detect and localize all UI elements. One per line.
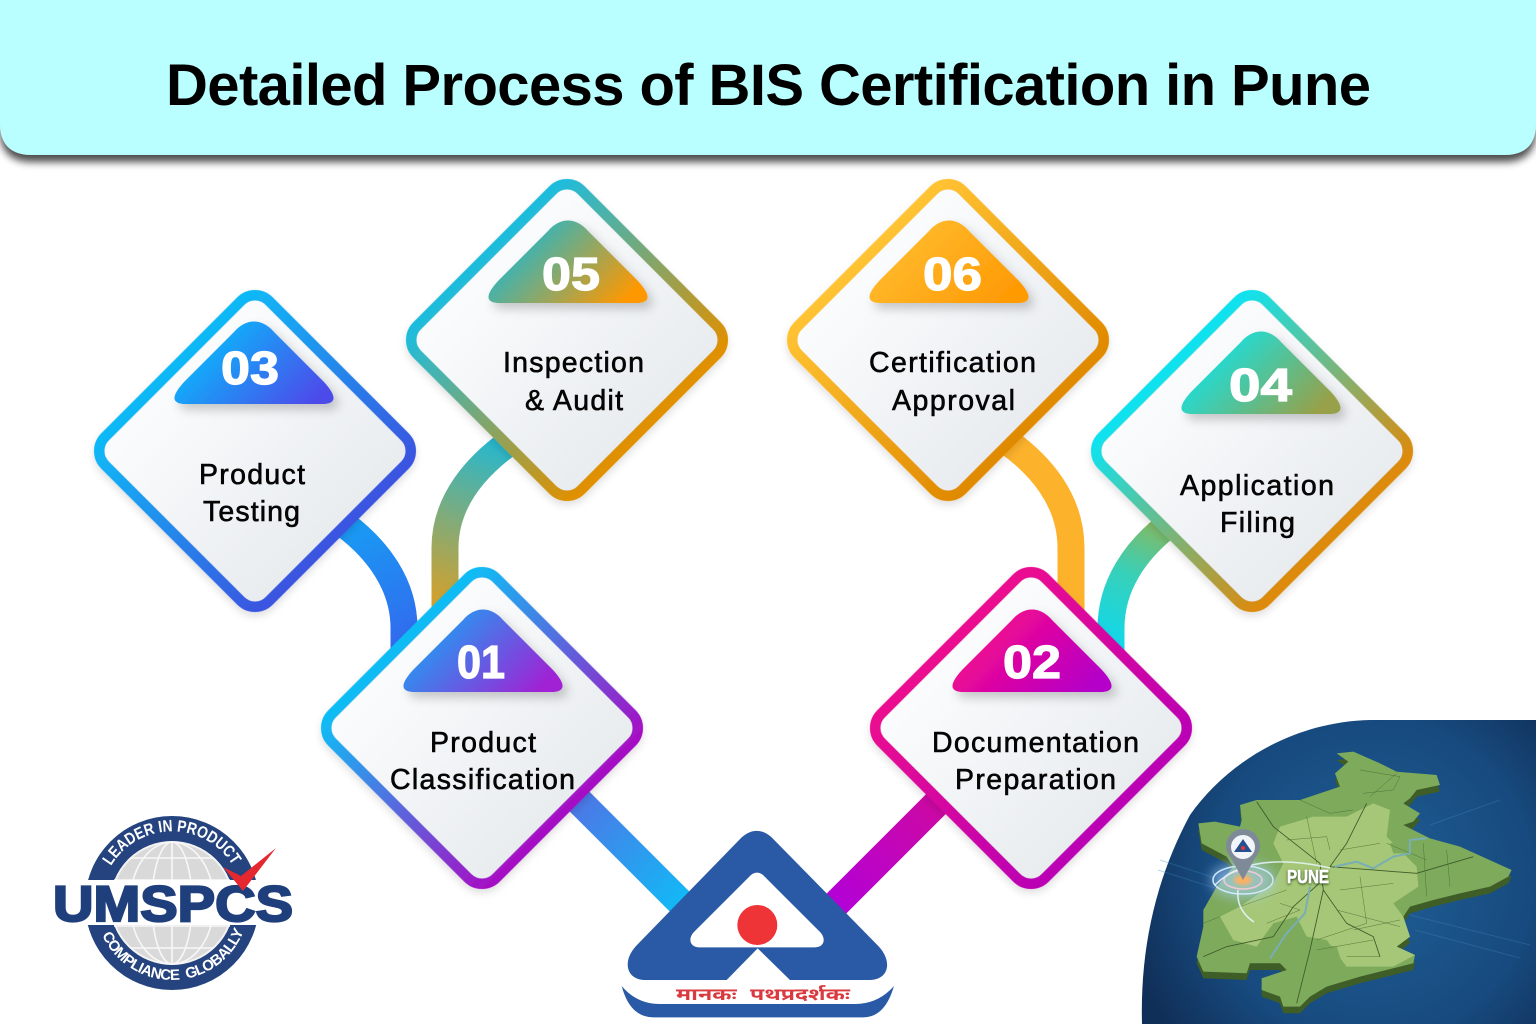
connector: step 04 to 02 — [1111, 525, 1168, 655]
Pune map panel — [1142, 720, 1536, 1024]
label: & Audit — [525, 385, 623, 417]
label: Product — [199, 459, 305, 491]
label: Filing — [1220, 507, 1295, 539]
brand name: UMSPCS — [53, 876, 293, 932]
BIS logo — [622, 831, 894, 1017]
badge 03 — [174, 322, 334, 404]
label: Classification — [390, 764, 575, 796]
connector: step 01 to BIS logo — [570, 792, 695, 917]
PUNE label: PUNE — [1287, 867, 1329, 887]
number 02: 02 — [1003, 636, 1061, 688]
connector: step 05 to 01 — [445, 442, 510, 615]
number 05: 05 — [542, 248, 600, 300]
step 03 Product Testing — [91, 287, 419, 615]
BIS motto: पथप्रदर्शकः — [750, 985, 850, 1007]
badge 02 — [952, 610, 1112, 692]
globe grid — [110, 842, 234, 964]
label: Approval — [892, 385, 1015, 417]
label: Product — [430, 727, 536, 759]
ring text bottom: COMPLIANCE GLOBALLY — [104, 926, 242, 980]
badge 05 — [488, 220, 648, 303]
minor roads — [1203, 770, 1450, 957]
title: Detailed Process of BIS Certification in Pune — [166, 53, 1371, 118]
number 03: 03 — [221, 342, 279, 394]
connector: step 03 to 01 — [345, 525, 404, 655]
ring text top: LEADER IN PRODUCT — [102, 820, 242, 866]
label: Documentation — [932, 727, 1139, 759]
red check mark — [223, 848, 276, 891]
label: Certification — [869, 347, 1036, 379]
step 05 Inspection & Audit — [403, 176, 731, 504]
header banner — [0, 0, 1536, 155]
number 01: 01 — [457, 636, 505, 688]
label: Preparation — [955, 764, 1116, 796]
connector: step 06 to 02 — [1008, 442, 1071, 615]
location pin — [1226, 829, 1260, 880]
map of Pune — [1197, 752, 1512, 1013]
BIS motto: मानकः — [676, 985, 737, 1007]
UMSPCS logo — [53, 816, 293, 990]
map circuit lines — [1158, 800, 1530, 958]
step 02 Documentation Preparation — [867, 564, 1195, 892]
badge 04 — [1181, 332, 1341, 414]
badge 06 — [869, 220, 1029, 303]
number 06: 06 — [923, 248, 982, 300]
river — [1270, 838, 1427, 958]
lighter terrain — [1220, 803, 1418, 967]
step 01 Product Classification — [318, 564, 646, 892]
darker terrain patches — [1313, 840, 1410, 967]
label: Testing — [203, 496, 300, 528]
badge 01 — [403, 610, 563, 692]
location glow — [1211, 862, 1275, 898]
label: Application — [1180, 470, 1334, 502]
step 06 Certification Approval — [784, 176, 1112, 504]
connector: step 02 to BIS logo — [825, 785, 955, 915]
number 04: 04 — [1229, 359, 1293, 411]
main roads — [1203, 802, 1473, 1003]
step 04 Application Filing — [1088, 287, 1416, 615]
label: Inspection — [503, 347, 644, 379]
